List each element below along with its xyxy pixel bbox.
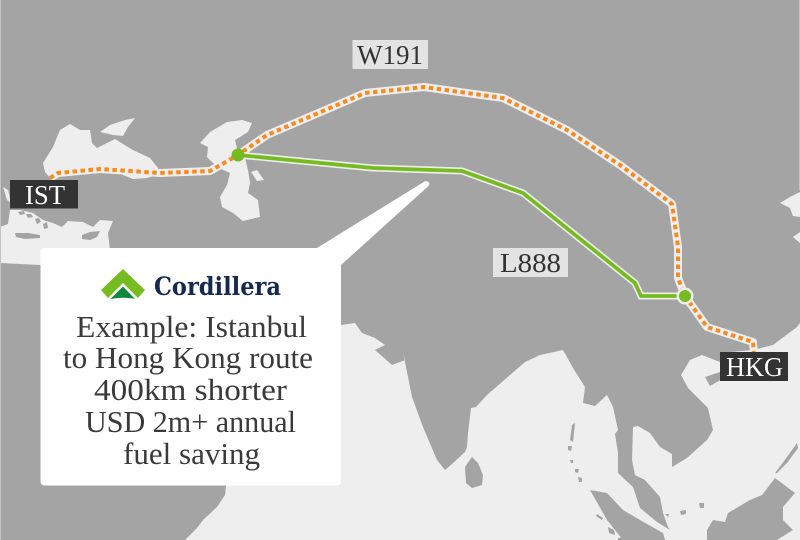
sea: northern Aegean sliver <box>3 187 11 203</box>
sea: Bohai and Yellow Sea <box>780 192 800 243</box>
callout panel <box>40 181 429 485</box>
callout text <box>63 309 313 471</box>
route W191 casing <box>50 87 754 354</box>
land: Sumatra <box>590 490 665 540</box>
land: Borneo <box>707 478 795 540</box>
eastern waypoint <box>676 288 694 304</box>
sea: Caspian islet <box>251 170 264 181</box>
land: Crete and Cyprus <box>15 231 100 240</box>
land: Palawan <box>775 443 798 473</box>
sea: Black Sea <box>43 124 158 179</box>
western waypoint <box>232 148 244 162</box>
route L888 line <box>238 155 685 296</box>
land: Andaman and small islands <box>568 423 704 540</box>
icon: Cordillera logo mark <box>101 269 145 299</box>
route L888 casing <box>238 155 685 296</box>
callout text: USD 2m+ annual <box>85 404 296 439</box>
sea: Mediterranean <box>0 210 113 268</box>
label: HKG: HKG <box>726 352 783 382</box>
label: W191: W191 <box>357 40 423 70</box>
label: IST <box>10 180 78 210</box>
route W191 dashed line <box>50 87 754 354</box>
land: Hainan <box>705 372 724 386</box>
callout text: to Hong Kong route <box>63 340 313 375</box>
label: L888: L888 <box>500 248 561 278</box>
land: Aegean islands <box>18 211 48 229</box>
callout text: Example: Istanbul <box>76 309 307 344</box>
sea: Indian Ocean and South China Sea <box>185 323 800 540</box>
land: Sri Lanka <box>465 457 483 488</box>
label: IST: IST <box>25 180 66 210</box>
callout text: fuel saving <box>123 436 260 471</box>
logo wordmark: Cordillera <box>154 272 281 301</box>
callout box with pointer <box>40 181 429 485</box>
sea: Caspian Sea <box>200 120 260 221</box>
callout text: 400km shorter <box>94 372 288 407</box>
sea: Sea of Azov <box>100 118 135 136</box>
